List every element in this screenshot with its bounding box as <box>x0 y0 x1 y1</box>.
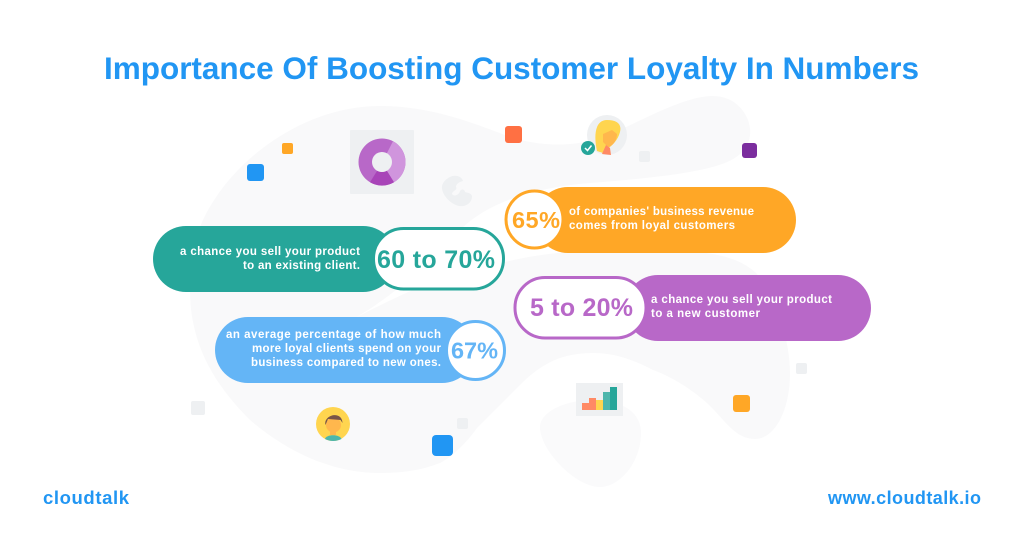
icon: woman avatar with check badge <box>581 115 627 155</box>
decorative square: grey bottom <box>457 418 468 429</box>
decorative square: red orange <box>505 126 522 143</box>
decorative square: orange small <box>282 143 293 154</box>
panel: 60 to 70%: to an existing client. <box>243 260 360 272</box>
panel: 67%: an average percentage of how much <box>226 329 441 341</box>
website url: www.cloudtalk.io <box>827 488 981 508</box>
logo: cloudtalk: cloudtalk <box>43 487 130 508</box>
panel: 60 to 70% <box>153 226 504 292</box>
background blobs <box>190 96 790 487</box>
panel: 67%: 67% <box>451 338 498 364</box>
decorative square: blue bottom <box>432 435 453 456</box>
panel: 60 to 70%: 60 to 70% <box>377 246 495 274</box>
icon: bar chart <box>576 383 623 416</box>
decorative square: orange right <box>733 395 750 412</box>
panel: 65%: comes from loyal customers <box>569 220 735 232</box>
decorative square: blue left <box>247 164 264 181</box>
icon: globe <box>442 176 472 206</box>
panel: 65% <box>506 187 796 253</box>
panel: 60 to 70%: a chance you sell your product <box>180 246 360 258</box>
decorative square: grey top <box>639 151 650 162</box>
panel: 5 to 20%: a chance you sell your product <box>651 294 832 306</box>
panel: 65%: 65% <box>512 207 560 233</box>
icon: man avatar <box>316 407 350 441</box>
panel: 5 to 20%: 5 to 20% <box>530 294 633 322</box>
title: Importance Of Boosting Customer Loyalty In Numbers <box>104 50 919 86</box>
panel: 67% <box>215 317 504 383</box>
icon: donut chart <box>350 130 414 194</box>
panel: 65%: of companies' business revenue <box>569 206 754 218</box>
panel: 67%: more loyal clients spend on your <box>252 343 442 355</box>
panel: 67%: business compared to new ones. <box>251 357 441 369</box>
decorative square: grey left <box>191 401 205 415</box>
panel: 5 to 20%: to a new customer <box>651 308 761 320</box>
decorative square: grey right <box>796 363 807 374</box>
decorative square: purple <box>742 143 757 158</box>
panel: 5 to 20% <box>515 275 871 341</box>
